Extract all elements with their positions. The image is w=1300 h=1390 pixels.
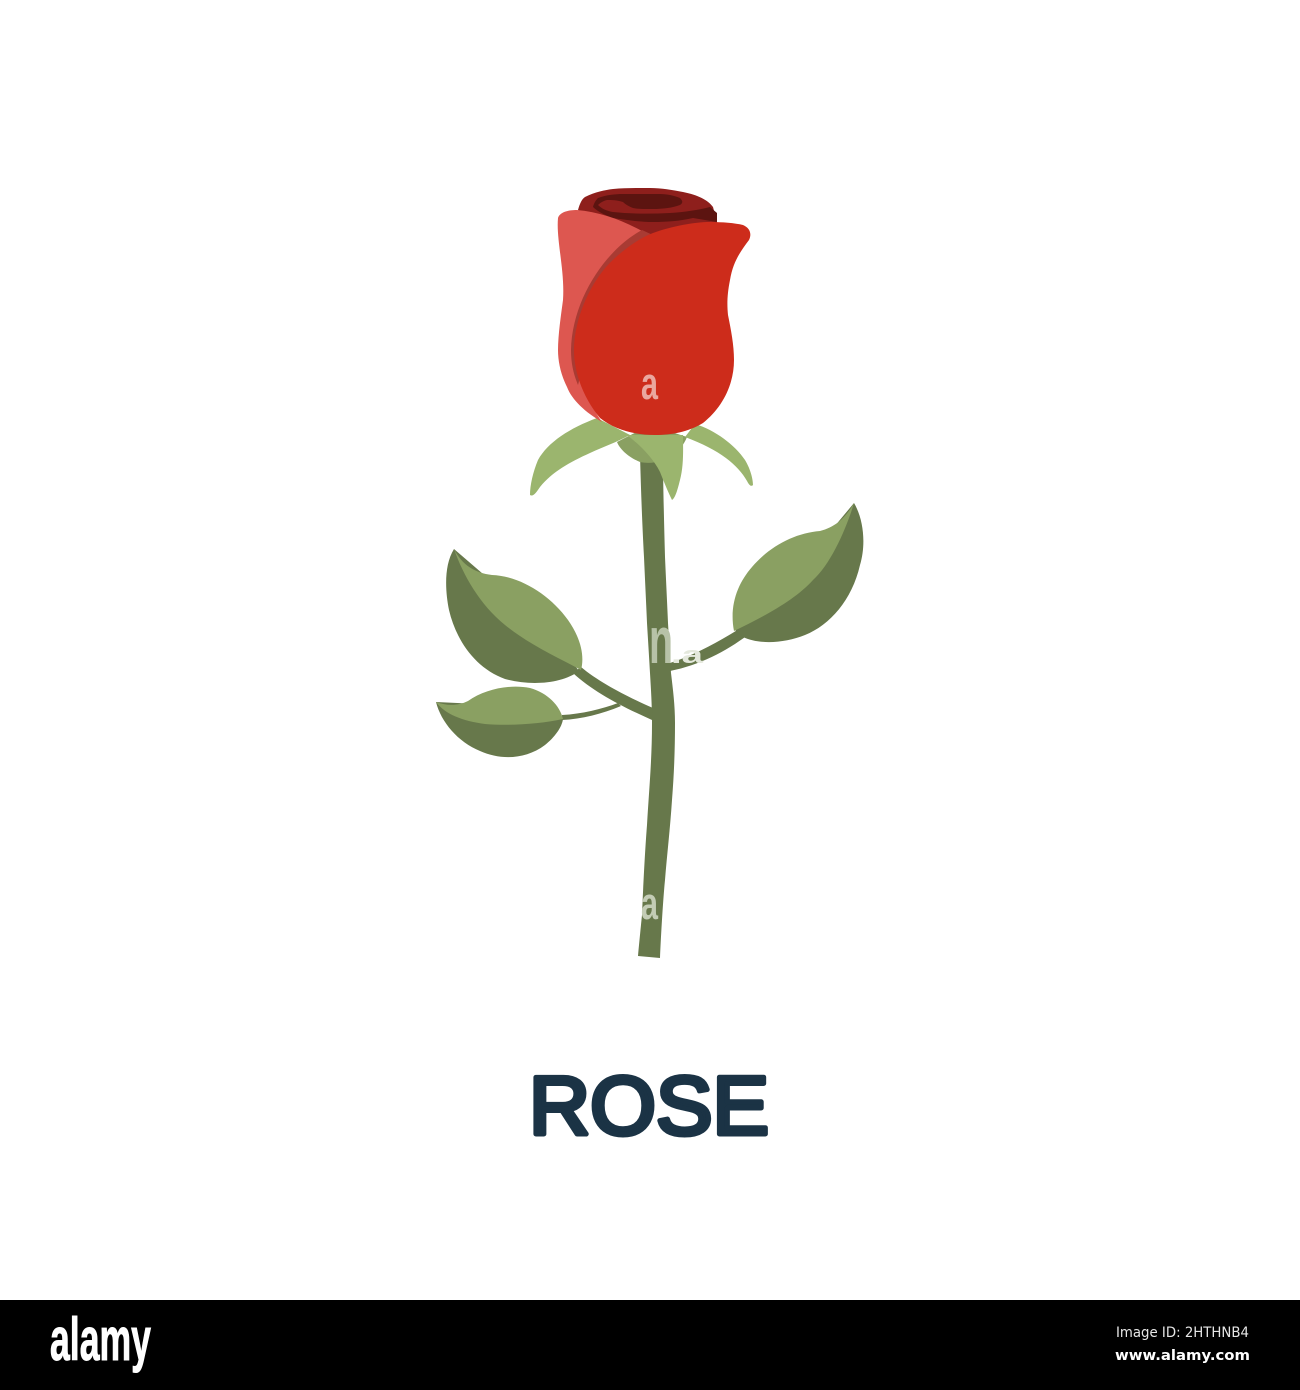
footer logo: alamy [50,1306,151,1373]
branch: right leaf [670,627,749,671]
bud inner spiral [593,194,717,222]
leaf: upper right [733,503,863,642]
petal shadow [571,230,655,385]
website: www.alamy.com [1115,1348,1250,1364]
front petal [574,222,750,435]
title: ROSE: ROSE [529,1059,769,1152]
branch: small leaf [562,703,621,720]
sepal: centre [627,435,683,500]
sepal: left [530,418,630,496]
watermark letters [641,358,704,929]
branch: left leaves [573,667,653,720]
back petal [558,210,642,422]
image id: Image ID: 2HTHNB4 [1116,1325,1249,1341]
bud top [578,188,717,242]
flower bud [530,188,753,500]
watermark: a on petal: a [641,358,659,409]
leaf: upper left [446,549,582,683]
sepal: right [685,424,753,486]
footer bar [0,1300,1300,1390]
watermark: dot and a on branch: .a [671,642,704,669]
leaf: small lower left [436,687,563,757]
watermark: n on stem: n [649,603,673,677]
rose illustration [436,188,863,958]
stem [638,455,675,958]
calyx [617,425,687,463]
watermark: a on stem base: a [641,878,659,929]
